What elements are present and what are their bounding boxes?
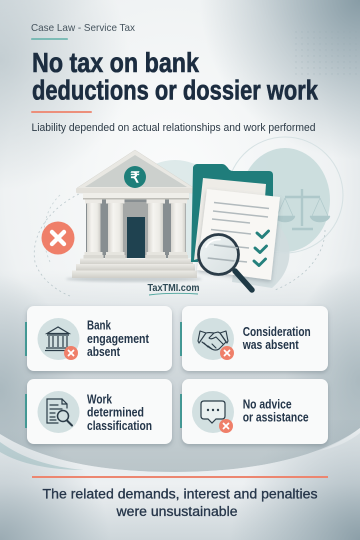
card: consideration was absent xyxy=(180,306,328,371)
title accent line xyxy=(31,111,92,113)
card text xyxy=(87,392,152,433)
door xyxy=(127,217,145,258)
card text: was absent xyxy=(242,338,299,352)
TaxTMI logo: TaxTMI.com xyxy=(148,283,200,294)
card text: classification xyxy=(87,419,152,433)
header: category label: Case Law - Service Tax xyxy=(31,22,136,34)
icon: document with magnifier xyxy=(38,391,80,433)
icon: speech bubble with cross xyxy=(192,391,234,433)
rupee emblem: ₹ xyxy=(130,170,140,186)
card text: engagement xyxy=(87,332,150,346)
illustration: folder and documents xyxy=(191,164,280,290)
card text: Consideration xyxy=(243,325,311,339)
icon: scales of justice xyxy=(275,189,330,229)
columns xyxy=(84,200,188,258)
card: no advice or assistance xyxy=(180,379,328,444)
back sheet xyxy=(194,178,266,260)
card text: Work xyxy=(87,392,112,406)
card text xyxy=(242,325,311,352)
icon: red cross badge xyxy=(42,222,74,254)
card text xyxy=(243,398,309,425)
card text: or assistance xyxy=(243,411,309,425)
footer conclusion: The related demands, interest and penalties xyxy=(42,486,318,502)
illustration: bank building xyxy=(66,150,202,282)
card text: absent xyxy=(87,345,121,359)
checklist sheet xyxy=(197,189,280,280)
card text: determined xyxy=(87,406,144,420)
check marks xyxy=(254,231,268,266)
backdrop circles and dashed arcs xyxy=(34,137,343,296)
hero illustration xyxy=(34,137,343,296)
card text xyxy=(87,318,150,359)
footer conclusion xyxy=(42,486,318,519)
card: bank engagement absent xyxy=(25,306,172,371)
card text: Bank xyxy=(87,318,111,332)
card text: No advice xyxy=(243,398,292,412)
title: No tax on bank xyxy=(32,47,199,78)
icon: handshake with cross xyxy=(192,318,234,360)
icon: magnifying glass xyxy=(198,234,252,290)
footer conclusion: were unsustainable xyxy=(115,504,238,519)
card: work determined classification xyxy=(25,379,172,444)
title xyxy=(32,47,318,106)
footer divider xyxy=(32,476,328,478)
header accent line xyxy=(31,38,68,40)
steps xyxy=(72,258,197,278)
icon: bank with cross xyxy=(38,318,80,360)
subtitle: Liability depended on actual relationships and work performed xyxy=(32,122,316,134)
folder xyxy=(191,164,273,262)
